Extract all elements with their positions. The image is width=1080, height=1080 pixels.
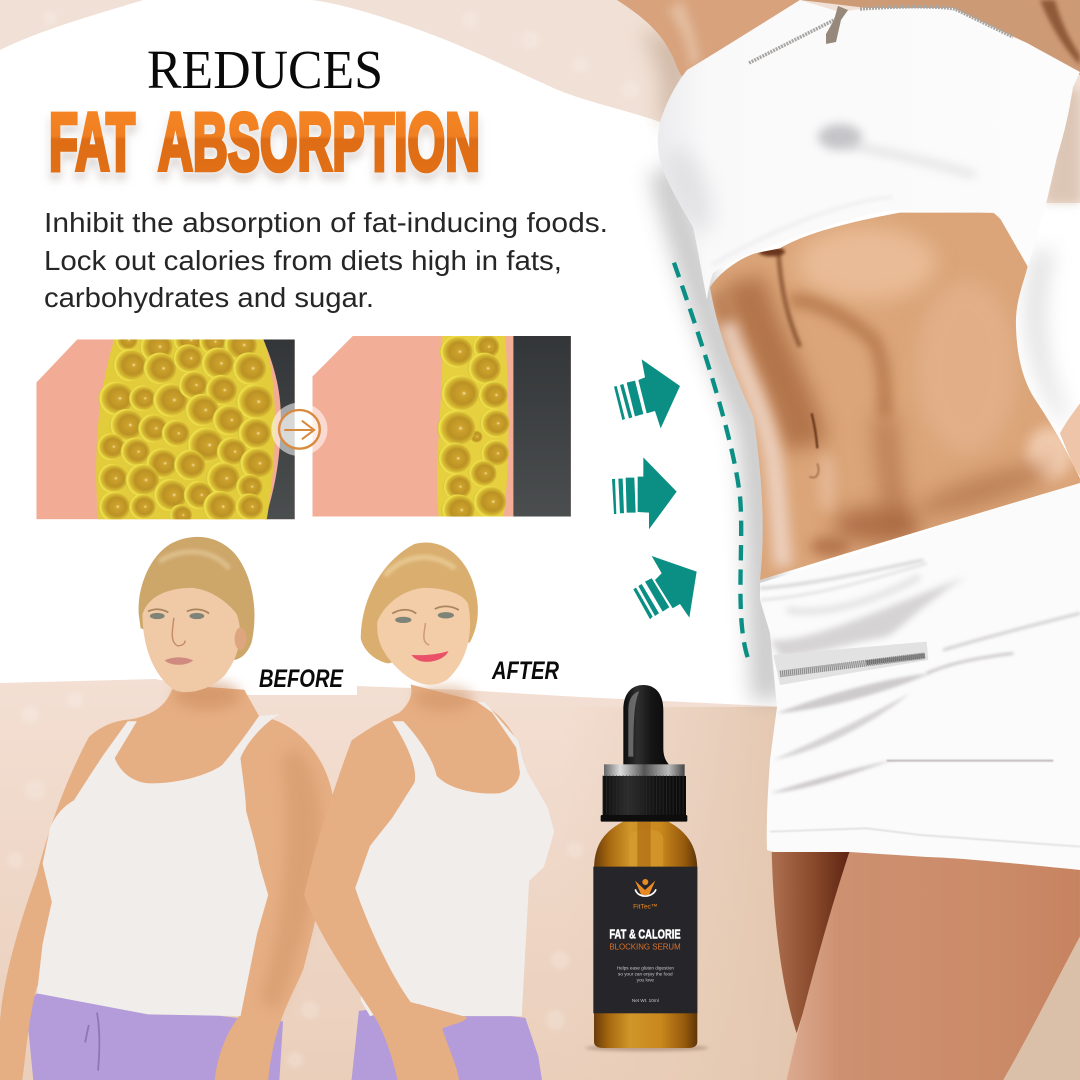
description text <box>44 207 608 313</box>
label <box>593 867 697 1013</box>
ribbed cap <box>603 776 686 815</box>
heading: FAT ABSORPTION: FAT <box>49 97 135 188</box>
brand name: FitTec™ <box>633 904 658 911</box>
product type: BLOCKING SERUM <box>609 942 681 951</box>
forearm and hand <box>304 877 467 1080</box>
soft shadow behind body <box>665 170 768 700</box>
hand on hip <box>1060 403 1080 477</box>
description text: carbohydrates and sugar. <box>44 282 374 313</box>
dropper bulb <box>623 685 671 767</box>
waistband folds <box>760 560 923 588</box>
skin <box>304 684 527 895</box>
net weight: Net Wt. 10ml <box>632 998 659 1003</box>
icon: transition arrow <box>271 403 327 456</box>
cap flange <box>601 815 687 822</box>
shadow on the right of top <box>1045 90 1080 203</box>
product description: so your can enjoy the food <box>618 971 673 976</box>
product description: Helps ease gluten digestion <box>617 965 674 970</box>
background: top peach band <box>0 0 1080 203</box>
skirt creases <box>927 653 1013 673</box>
product bottle <box>585 685 708 1051</box>
heading: FAT ABSORPTION <box>49 97 480 188</box>
background: peach deepening to the right <box>560 707 800 1080</box>
zipper band <box>773 642 928 685</box>
label: BEFORE: BEFORE <box>259 665 344 693</box>
main figure: woman's torso in white outfit <box>617 0 1080 1080</box>
bottle shadow <box>585 1045 708 1051</box>
teal arrows and dashed waist line <box>612 263 751 665</box>
shirt <box>37 714 279 1016</box>
arrow 2 <box>612 457 677 529</box>
dashed waist curve <box>674 263 751 665</box>
description text: Lock out calories from diets high in fats, <box>44 245 562 276</box>
panel: fat cells before <box>36 326 295 526</box>
fat cell comparison panels <box>36 326 571 526</box>
before and after women <box>0 537 554 1080</box>
arrow 3 <box>633 556 697 619</box>
description text: Inhibit the absorption of fat-inducing foods. <box>44 207 608 238</box>
logo <box>635 879 656 896</box>
silver collar <box>604 764 685 776</box>
face <box>142 588 240 692</box>
hair <box>361 542 478 663</box>
panel: fat cells after <box>312 334 571 526</box>
white crop top <box>658 0 1080 300</box>
woman: before <box>0 537 333 1080</box>
legs <box>772 850 1080 1080</box>
background dots <box>7 11 639 1068</box>
raised arms and chest skin <box>617 0 1080 78</box>
woman: after <box>304 542 554 1080</box>
hair <box>139 537 254 660</box>
skin <box>0 684 333 1080</box>
shirt <box>355 702 554 1016</box>
heading: REDUCES: REDUCES <box>147 39 383 100</box>
face <box>377 588 470 685</box>
armpit shadow on background <box>640 30 690 125</box>
bare midriff <box>710 213 1080 580</box>
pants <box>26 993 283 1080</box>
product name: FAT & CALORIE <box>609 927 681 942</box>
pants <box>352 1004 542 1080</box>
white skirt <box>760 483 1080 870</box>
background: lower peach band <box>0 679 1080 1080</box>
soft shadow right of waist <box>1026 250 1070 420</box>
heading: FAT ABSORPTION: ABSORPTION <box>158 97 480 188</box>
amber glass body <box>594 822 697 1048</box>
label: AFTER: AFTER <box>491 657 559 685</box>
product description <box>617 965 674 982</box>
product description: you love <box>637 977 654 982</box>
arrow 1 <box>614 359 680 428</box>
top zipper <box>749 7 1013 63</box>
